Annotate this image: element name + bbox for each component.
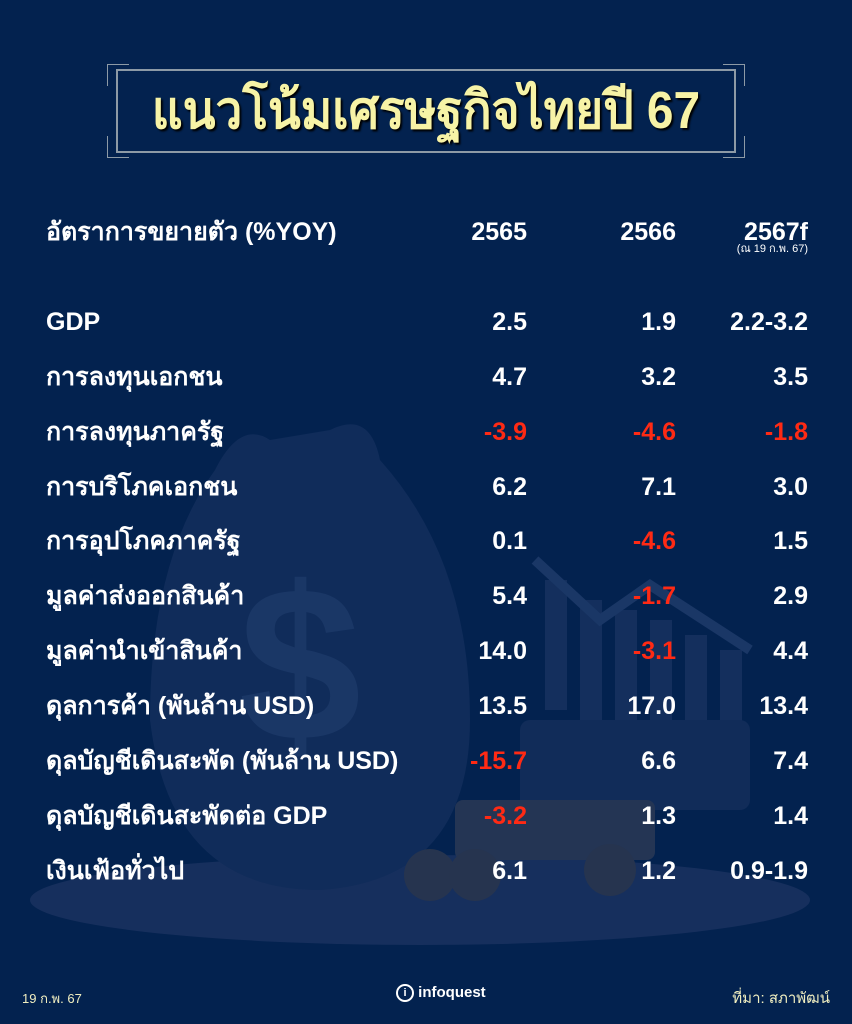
- table rows: 1.2: [641, 857, 676, 885]
- table header: 2565: [471, 218, 527, 246]
- table rows: การบริโภคเอกชน: [46, 473, 237, 501]
- table rows: 3.0: [773, 473, 808, 501]
- table rows: การอุปโภคภาครัฐ: [46, 527, 241, 555]
- table rows: 1.5: [773, 527, 808, 555]
- table rows: 3.2: [641, 363, 676, 391]
- table header: 2566: [620, 218, 676, 246]
- table rows: 2.2-3.2: [730, 308, 808, 336]
- table rows: -15.7: [470, 747, 527, 775]
- table rows: 3.5: [773, 363, 808, 391]
- table rows: -3.1: [633, 637, 676, 665]
- footer date: 19 ก.พ. 67: [22, 991, 82, 1006]
- table rows: 7.4: [773, 747, 808, 775]
- table rows: 5.4: [492, 582, 527, 610]
- table rows: มูลค่าส่งออกสินค้า: [46, 582, 244, 610]
- table rows: ดุลการค้า (พันล้าน USD): [46, 692, 314, 720]
- table header: อัตราการขยายตัว (%YOY): [46, 218, 337, 246]
- table rows: เงินเฟ้อทั่วไป: [46, 857, 184, 885]
- table rows: การลงทุนเอกชน: [46, 363, 222, 391]
- table rows: 2.9: [773, 582, 808, 610]
- source: ที่มา: สภาพัฒน์: [732, 990, 830, 1007]
- table rows: 2.5: [492, 308, 527, 336]
- logo: infoquest: infoquest: [418, 984, 486, 1001]
- table rows: 6.1: [492, 857, 527, 885]
- table rows: -4.6: [633, 418, 676, 446]
- table rows: มูลค่านำเข้าสินค้า: [46, 637, 242, 665]
- table rows: การลงทุนภาครัฐ: [46, 418, 224, 446]
- table header: 2567f: [744, 218, 808, 246]
- table rows: 6.6: [641, 747, 676, 775]
- table header: (ณ 19 ก.พ. 67): [737, 243, 808, 255]
- table rows: -1.8: [765, 418, 808, 446]
- table rows: -3.9: [484, 418, 527, 446]
- table rows: 1.9: [641, 308, 676, 336]
- table rows: 14.0: [478, 637, 527, 665]
- table rows: 13.4: [759, 692, 808, 720]
- table rows: 4.4: [773, 637, 808, 665]
- table rows: 4.7: [492, 363, 527, 391]
- table rows: 1.4: [773, 802, 808, 830]
- table rows: 1.3: [641, 802, 676, 830]
- table rows: -3.2: [484, 802, 527, 830]
- background illustration: $: [239, 541, 361, 787]
- table rows: ดุลบัญชีเดินสะพัด (พันล้าน USD): [46, 747, 398, 775]
- table rows: -1.7: [633, 582, 676, 610]
- title: แนวโน้มเศรษฐกิจไทยปี 67: [152, 82, 700, 140]
- table rows: 0.1: [492, 527, 527, 555]
- table rows: [46, 308, 808, 885]
- table rows: GDP: [46, 308, 100, 336]
- table rows: 7.1: [641, 473, 676, 501]
- table rows: 13.5: [478, 692, 527, 720]
- table rows: ดุลบัญชีเดินสะพัดต่อ GDP: [46, 802, 327, 830]
- table rows: 6.2: [492, 473, 527, 501]
- logo: infoquest: i: [403, 987, 407, 999]
- table header: [46, 218, 808, 255]
- table rows: 0.9-1.9: [730, 857, 808, 885]
- title frame: [107, 64, 745, 158]
- table rows: 17.0: [627, 692, 676, 720]
- table rows: -4.6: [633, 527, 676, 555]
